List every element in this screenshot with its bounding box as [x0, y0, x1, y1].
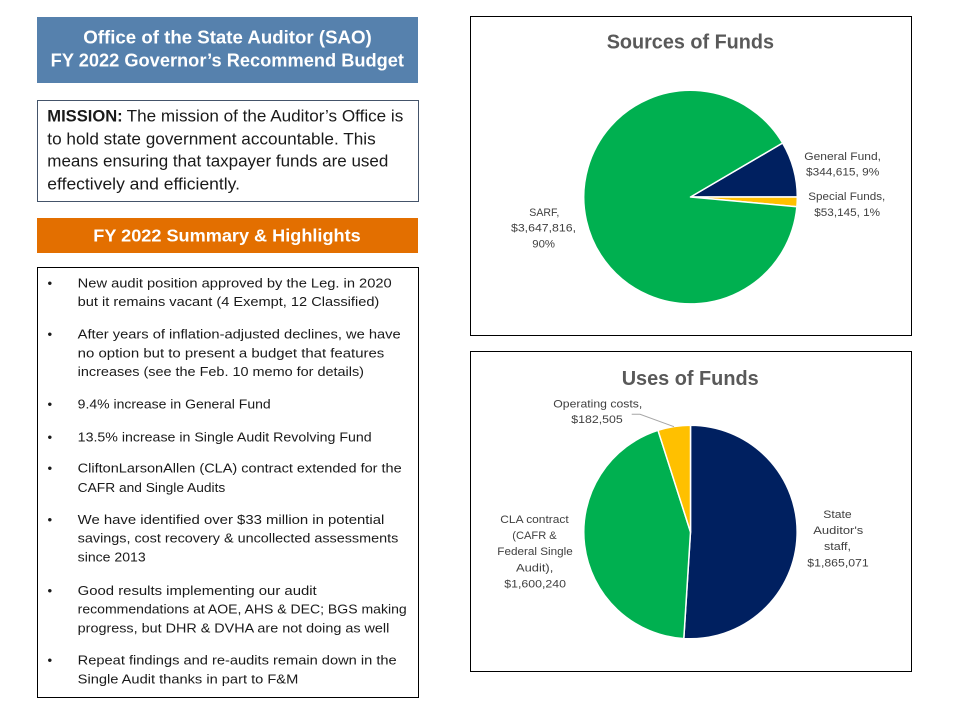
- panel: mission statement: means ensuring that taxpayer funds are used: [47, 153, 388, 171]
- bullet: revolving fund increase: 13.5% increase in Single Audit Revolving Fund: [78, 429, 372, 444]
- label: operating costs: $182,505: [571, 414, 623, 426]
- label: operating costs: [553, 398, 642, 426]
- label: general fund: [804, 151, 881, 179]
- bullet: repeat findings: •: [48, 652, 52, 667]
- pie chart: sources: [584, 90, 797, 304]
- bullet: audit position: but it remains vacant (4 Exempt, 12 Classified): [78, 294, 379, 309]
- label: operating costs: Operating costs,: [553, 398, 642, 410]
- label: SARF: $3,647,816,: [511, 223, 576, 235]
- pie chart: uses: [584, 425, 797, 639]
- label: CLA contract: $1,600,240: [504, 579, 566, 591]
- bullet: revolving fund increase: •: [48, 429, 52, 444]
- label: CLA contract: Audit),: [516, 563, 553, 575]
- label: SARF: [511, 207, 576, 251]
- label: state auditor's staff: Auditor's: [813, 525, 864, 537]
- bullet: CLA contract: [48, 461, 402, 495]
- label: state auditor's staff: State: [823, 509, 852, 521]
- bullet: audit position: [48, 275, 392, 309]
- panel: mission statement: MISSION:: [47, 108, 123, 126]
- bullet: audit position: New audit position approved by the Leg. in 2020: [78, 275, 392, 290]
- bullet: potential savings: We have identified over $33 million in potential: [78, 512, 384, 527]
- bullet: general fund increase: 9.4% increase in General Fund: [78, 397, 271, 412]
- label: CLA contract: (CAFR &: [512, 530, 557, 542]
- label: general fund: General Fund,: [804, 151, 881, 163]
- panel: mission statement: to hold state government accountable. This: [47, 130, 376, 148]
- bullet: budget increases: no option but to present a budget that features: [78, 345, 385, 360]
- bullet: budget increases: After years of inflation-adjusted declines, we have: [78, 327, 401, 342]
- label: special funds: [808, 191, 885, 219]
- chart title: uses of funds: Uses of Funds: [622, 368, 759, 390]
- label: state auditor's staff: $1,865,071: [807, 558, 869, 570]
- bullet: audit recommendations: [48, 583, 407, 636]
- bullet: CLA contract: •: [48, 461, 52, 476]
- title banner: [37, 17, 418, 83]
- bullet: budget increases: •: [48, 327, 52, 342]
- label: special funds: $53,145, 1%: [814, 207, 880, 219]
- bullet: CLA contract: CliftonLarsonAllen (CLA) contract extended for the: [78, 461, 402, 476]
- chart title: sources of funds: Sources of Funds: [607, 31, 774, 53]
- bullet: potential savings: •: [48, 512, 52, 527]
- label: CLA contract: [497, 514, 573, 591]
- bullet: CLA contract: CAFR and Single Audits: [78, 480, 226, 495]
- bullet: repeat findings: Single Audit thanks in part to F&M: [78, 671, 298, 686]
- heading: summary and highlights: FY 2022 Summary & Highlights: [93, 226, 361, 246]
- label: CLA contract: CLA contract: [500, 514, 570, 526]
- bullet: general fund increase: •: [48, 397, 52, 412]
- heading: summary and highlights: [37, 218, 418, 253]
- bullet: potential savings: since 2013: [78, 550, 146, 565]
- bullet: repeat findings: Repeat findings and re-audits remain down in the: [78, 652, 397, 667]
- title banner: Office of the State Auditor (SAO): [83, 27, 372, 47]
- label: SARF: SARF,: [529, 207, 559, 219]
- bullet: audit recommendations: Good results implementing our audit: [78, 583, 317, 598]
- panel: uses of funds chart: [470, 352, 912, 672]
- panel: mission statement: The mission of the Auditor’s Office is: [127, 108, 403, 126]
- panel: mission statement: effectively and efficiently.: [47, 175, 240, 193]
- bullet: audit recommendations: recommendations at AOE, AHS & DEC; BGS making: [78, 601, 407, 616]
- bullet: budget increases: [48, 327, 401, 379]
- label: general fund: $344,615, 9%: [806, 167, 879, 179]
- panel: sources of funds chart: [470, 16, 912, 336]
- bullet: budget increases: increases (see the Feb. 10 memo for details): [78, 364, 364, 379]
- bullet: audit recommendations: •: [48, 583, 52, 598]
- panel: highlights list: [38, 268, 418, 698]
- bullet: repeat findings: [48, 652, 397, 686]
- label: state auditor's staff: [807, 509, 869, 570]
- bullet: audit recommendations: progress, but DHR & DVHA are not doing as well: [78, 621, 389, 636]
- label: SARF: 90%: [532, 239, 555, 251]
- bullet: audit position: •: [48, 275, 52, 290]
- leader line: operating costs: [632, 414, 674, 427]
- label: state auditor's staff: staff,: [824, 541, 851, 553]
- label: CLA contract: Federal Single: [497, 546, 573, 558]
- label: special funds: Special Funds,: [808, 191, 885, 203]
- panel: mission statement: [38, 100, 418, 202]
- bullet: potential savings: [48, 512, 399, 565]
- bullet: potential savings: savings, cost recovery & uncollected assessments: [78, 531, 399, 546]
- title banner: FY 2022 Governor’s Recommend Budget: [51, 51, 404, 71]
